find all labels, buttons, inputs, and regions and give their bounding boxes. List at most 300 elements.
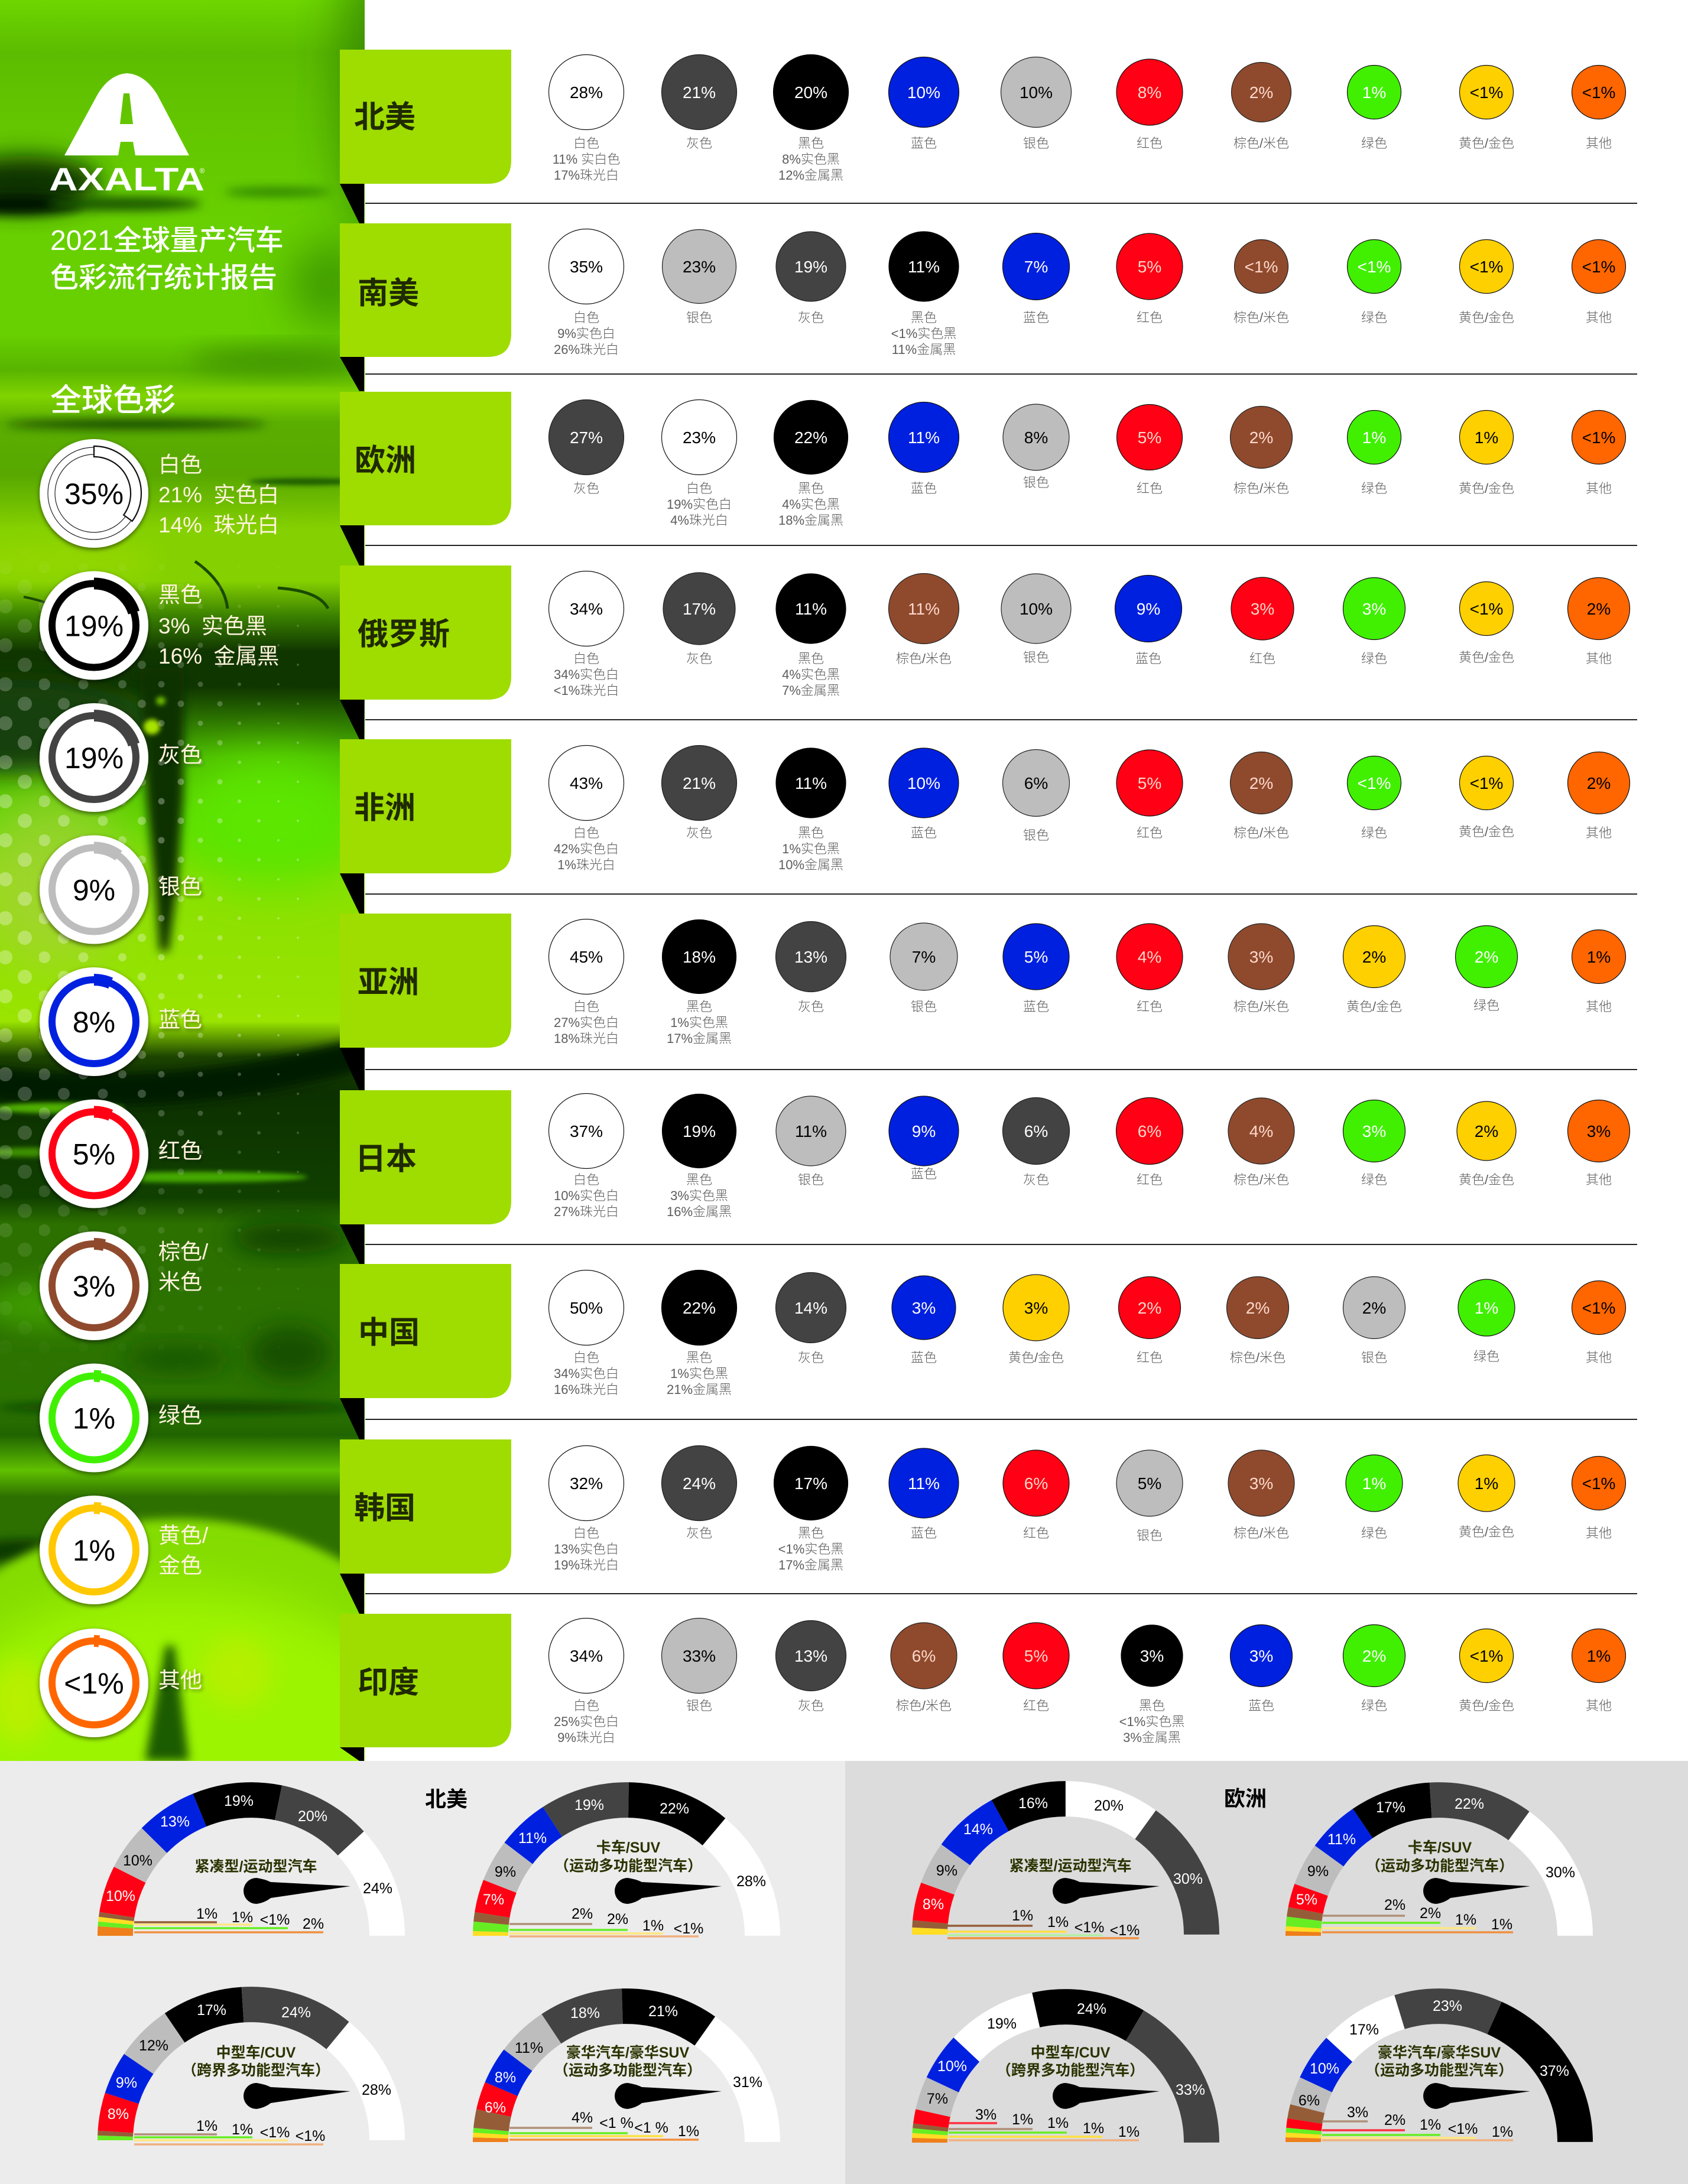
- 印度 white: 白色: [573, 1698, 599, 1713]
- gauge: NA compact/sport: 1%: [232, 1909, 253, 1926]
- 南美 brown: <1%: [1245, 258, 1278, 276]
- gauge: EU truck/SUV: （运动多功能型汽车）: [1366, 1858, 1514, 1874]
- gauge: NA truck/SUV: 19%: [574, 1797, 604, 1814]
- 亚洲 silver: 银色: [911, 999, 937, 1014]
- 南美 red: 5%: [1138, 258, 1161, 276]
- 俄罗斯 yellow: 黄色/金色: [1459, 650, 1514, 665]
- global other medallion: <1%: [64, 1667, 124, 1700]
- gauge: EU mid/CUV: [927, 2001, 1205, 2143]
- 中国 grey: 14%: [794, 1299, 827, 1317]
- 非洲 silver: [1002, 749, 1070, 843]
- 非洲 white: [548, 746, 624, 872]
- 南美 black: <1%实色黑: [891, 326, 956, 341]
- gauge: NA truck/SUV: 1%: [642, 1918, 664, 1934]
- gauge: NA compact/sport: 紧凑型/运动型汽车: [195, 1858, 317, 1875]
- 俄罗斯 blue: [1115, 576, 1182, 666]
- 非洲 other: 其他: [1586, 826, 1612, 840]
- 印度 yellow: [1459, 1629, 1514, 1713]
- 北美 black: [773, 54, 849, 183]
- 俄罗斯 grey: 灰色: [686, 651, 712, 666]
- gauge: NA luxury: <1 %: [634, 2120, 668, 2136]
- gauge: EU mid/CUV: 1%: [1012, 2111, 1033, 2128]
- gauge: EU truck/SUV: 22%: [1455, 1796, 1484, 1812]
- 欧洲 black: 黑色: [798, 481, 824, 496]
- gauge: EU compact/sport: 20%: [1094, 1798, 1124, 1814]
- 日本 black: 19%: [683, 1122, 716, 1140]
- 亚洲 black: 1%实色黑: [670, 1015, 728, 1030]
- 南美 white: [548, 229, 624, 357]
- 欧洲 red: 红色: [1137, 481, 1163, 496]
- logo: Axalta: [49, 73, 205, 197]
- gauge: NA mid/CUV: 中型车/CUV: [216, 2045, 296, 2061]
- global black label: 黑色: [158, 583, 202, 607]
- gauge: EU luxury: 23%: [1433, 1998, 1462, 2014]
- 非洲 black: 黑色: [798, 826, 824, 840]
- 俄罗斯 black: 4%实色黑: [782, 667, 840, 682]
- global black label: 16% 金属黑: [158, 644, 279, 668]
- 南美 brown: [1233, 240, 1289, 325]
- 非洲 brown: 2%: [1249, 774, 1273, 792]
- 中国 brown: 棕色/米色: [1230, 1350, 1286, 1365]
- gauge: NA mid/CUV: 28%: [362, 2082, 391, 2098]
- global white medallion: [40, 439, 148, 548]
- title: 2021全球量产汽车: [50, 225, 284, 256]
- 韩国 grey: 24%: [683, 1474, 716, 1493]
- 日本 yellow: 黄色/金色: [1459, 1172, 1514, 1187]
- 南美 brown: 棕色/米色: [1233, 310, 1289, 325]
- 欧洲 black: 18%金属黑: [778, 513, 843, 528]
- 北美 black: 20%: [794, 83, 827, 102]
- 韩国 yellow: [1458, 1455, 1515, 1539]
- 南美 grey: [776, 232, 846, 325]
- 北美 blue: 蓝色: [911, 136, 937, 151]
- gauge: NA mid/CUV: [108, 2002, 391, 2144]
- 印度 blue: 蓝色: [1248, 1698, 1274, 1713]
- gauge: NA luxury: 1%: [678, 2123, 699, 2140]
- 中国 blue: [892, 1276, 956, 1365]
- 中国 silver: 2%: [1362, 1299, 1386, 1317]
- 欧洲 grey: 灰色: [573, 481, 599, 496]
- 俄罗斯 silver: 10%: [1020, 600, 1053, 618]
- 俄罗斯 other: 2%: [1587, 600, 1611, 618]
- 中国 silver: 银色: [1361, 1350, 1387, 1365]
- 欧洲 brown: 2%: [1249, 428, 1273, 447]
- 非洲 black: 11%: [795, 774, 827, 792]
- 中国 black: 黑色: [686, 1350, 712, 1365]
- 韩国 white: 13%实色白: [554, 1542, 619, 1556]
- 欧洲 green: 绿色: [1361, 481, 1387, 496]
- 北美 black: 12%金属黑: [778, 168, 843, 183]
- 非洲 blue: 蓝色: [911, 826, 937, 840]
- 非洲 blue: 10%: [907, 774, 940, 792]
- 欧洲 green: 1%: [1362, 428, 1386, 447]
- 亚洲 green: 2%: [1475, 948, 1498, 966]
- 北美 yellow: 黄色/金色: [1459, 136, 1514, 151]
- 印度 green: 2%: [1362, 1647, 1386, 1665]
- title: [50, 225, 284, 294]
- 北美 silver: 银色: [1023, 136, 1049, 151]
- 韩国 black: 黑色: [798, 1526, 824, 1540]
- 中国 white: 16%珠光白: [554, 1382, 619, 1397]
- title: 色彩流行统计报告: [50, 262, 277, 294]
- 南美 blue: 7%: [1024, 258, 1048, 276]
- 北美 white: 11% 实白色: [553, 152, 620, 167]
- 俄罗斯 white: 34%实色白: [554, 667, 619, 682]
- 中国 blue: 3%: [912, 1299, 936, 1317]
- 中国 other: [1572, 1281, 1625, 1365]
- 韩国 blue: [889, 1448, 959, 1540]
- 印度 black: [1119, 1625, 1184, 1745]
- gauge: NA truck/SUV: （运动多功能型汽车）: [554, 1858, 702, 1874]
- global green label: 绿色: [158, 1403, 202, 1428]
- gauge: NA truck/SUV: 22%: [660, 1800, 689, 1817]
- 非洲 blue: [889, 748, 959, 840]
- 中国 grey: 灰色: [798, 1350, 824, 1365]
- gauge: NA luxury: [485, 2003, 762, 2142]
- 日本 silver: [776, 1096, 846, 1187]
- 欧洲 blue: 11%: [908, 428, 940, 447]
- tab: 欧洲: 欧洲: [355, 444, 416, 478]
- 南美 green: <1%: [1358, 258, 1391, 276]
- 欧洲 yellow: 1%: [1475, 428, 1498, 447]
- 欧洲 grey: [548, 399, 624, 496]
- panel: Europe row: [340, 392, 1625, 528]
- 南美 black: 11%: [908, 258, 940, 276]
- 中国 brown: [1227, 1276, 1288, 1365]
- 亚洲 other: 1%: [1587, 948, 1611, 966]
- 中国 red: 2%: [1138, 1299, 1161, 1317]
- 韩国 brown: [1228, 1450, 1294, 1540]
- 亚洲 other: 其他: [1586, 999, 1612, 1014]
- 日本 yellow: [1457, 1101, 1516, 1187]
- global red label: 红色: [158, 1139, 202, 1163]
- 日本 blue: 9%: [912, 1122, 936, 1140]
- gauge: NA mid/CUV: 12%: [139, 2037, 168, 2054]
- 欧洲 white: 19%实色白: [667, 497, 732, 512]
- gauge: EU compact/sport: 1%: [1012, 1907, 1033, 1924]
- tab: 韩国: [340, 1439, 511, 1574]
- gauge: NA compact/sport: 1%: [196, 1906, 218, 1922]
- tab: 北美: [340, 50, 511, 184]
- 日本 blue: 蓝色: [911, 1166, 937, 1181]
- 北美 brown: 2%: [1249, 83, 1273, 102]
- gauge: NA luxury: 11%: [515, 2040, 543, 2056]
- 非洲 grey: 灰色: [686, 826, 712, 840]
- 中国 white: 34%实色白: [554, 1366, 619, 1381]
- 印度 yellow: 黄色/金色: [1459, 1698, 1514, 1713]
- 非洲 black: 10%金属黑: [778, 857, 843, 872]
- 北美 black: 8%实色黑: [782, 152, 840, 167]
- gauge: EU mid/CUV: 10%: [937, 2058, 967, 2075]
- global black label: 3% 实色黑: [158, 614, 267, 638]
- 北美 white: [548, 54, 624, 183]
- tab: 非洲: [340, 739, 511, 873]
- 北美 grey: 灰色: [686, 136, 712, 151]
- 亚洲 brown: [1228, 924, 1294, 1014]
- gauge: NA truck/SUV: 卡车/SUV: [596, 1840, 660, 1856]
- gauge: EU truck/SUV: 卡车/SUV: [1408, 1840, 1472, 1856]
- 韩国 green: 1%: [1362, 1474, 1386, 1493]
- 南美 black: 11%金属黑: [892, 342, 956, 357]
- 俄罗斯 blue: 9%: [1137, 600, 1160, 618]
- 北美 green: 1%: [1362, 83, 1386, 102]
- 俄罗斯 other: 其他: [1586, 651, 1612, 666]
- 欧洲 white: 4%珠光白: [670, 513, 728, 528]
- gauge: EU mid/CUV: 24%: [1077, 2001, 1106, 2017]
- global yellow medallion: [40, 1496, 148, 1604]
- gauge: EU luxury: 2%: [1384, 2112, 1405, 2128]
- gauge: NA truck/SUV: 9%: [495, 1864, 516, 1880]
- gauge: NA truck/SUV: 11%: [518, 1830, 547, 1847]
- 俄罗斯 red: [1231, 577, 1294, 666]
- panel: China row: [340, 1264, 1625, 1398]
- 韩国 white: 19%珠光白: [554, 1558, 619, 1572]
- 欧洲 silver: [1003, 404, 1069, 490]
- 韩国 red: 6%: [1024, 1474, 1048, 1493]
- global yellow label: [158, 1523, 209, 1578]
- 日本 brown: 棕色/米色: [1233, 1172, 1289, 1187]
- 非洲 black: [776, 748, 846, 872]
- 亚洲 brown: 3%: [1249, 948, 1273, 966]
- global brown medallion: 3%: [73, 1270, 115, 1303]
- 印度 silver: 33%: [683, 1647, 716, 1665]
- global green medallion: 1%: [73, 1402, 115, 1435]
- 韩国 silver: 5%: [1138, 1474, 1161, 1493]
- 非洲 grey: [662, 746, 736, 840]
- gauge: NA truck/SUV: 28%: [736, 1873, 766, 1890]
- panel: South America row: [340, 223, 1625, 357]
- 北美 white: 白色: [573, 136, 599, 151]
- gauge: EU mid/CUV: 1%: [1118, 2124, 1140, 2140]
- gauge: EU compact/sport: 8%: [923, 1896, 944, 1913]
- 亚洲 green: [1455, 925, 1518, 1013]
- 印度 other: 1%: [1587, 1647, 1611, 1665]
- 北美 red: [1116, 59, 1183, 151]
- 南美 white: 35%: [570, 258, 603, 276]
- 日本 blue: [889, 1096, 959, 1181]
- 印度 other: [1572, 1629, 1625, 1713]
- 亚洲 red: 4%: [1138, 948, 1161, 966]
- 俄罗斯 yellow: <1%: [1470, 600, 1503, 618]
- 印度 black: 3%: [1140, 1647, 1164, 1665]
- global white label: [158, 453, 279, 537]
- gauge: NA compact/sport: 24%: [363, 1880, 392, 1897]
- 北美 green: 绿色: [1361, 136, 1387, 151]
- gauge: NA compact/sport: [106, 1793, 392, 1936]
- 中国 grey: [775, 1273, 846, 1365]
- tab: 北美: 北美: [354, 100, 415, 135]
- 非洲 yellow: 黄色/金色: [1459, 824, 1514, 839]
- 俄罗斯 green: [1343, 578, 1405, 666]
- 俄罗斯 black: 7%金属黑: [782, 683, 840, 698]
- 俄罗斯 silver: 银色: [1023, 650, 1049, 665]
- tab: 日本: [340, 1090, 511, 1224]
- 印度 blue: 3%: [1249, 1647, 1273, 1665]
- global black medallion: [40, 571, 148, 680]
- 中国 white: 50%: [570, 1299, 603, 1317]
- 欧洲 black: [774, 401, 848, 528]
- gauge: NA mid/CUV: 8%: [108, 2106, 129, 2123]
- 欧洲 grey: 27%: [570, 428, 603, 447]
- panel: Europe gauges background: [845, 1761, 1688, 2184]
- 印度 yellow: <1%: [1470, 1647, 1503, 1665]
- 日本 grey: [1002, 1098, 1070, 1187]
- gauge: EU compact/sport: 9%: [936, 1863, 957, 1879]
- 印度 red: 红色: [1023, 1698, 1049, 1713]
- 欧洲 silver: 8%: [1024, 428, 1048, 447]
- 韩国 red: [1003, 1450, 1069, 1540]
- 南美 other: [1572, 240, 1625, 325]
- gauge: NA compact/sport: 2%: [303, 1916, 324, 1932]
- gauge: NA luxury: 6%: [485, 2100, 506, 2116]
- 南美 grey: 19%: [794, 258, 827, 276]
- 欧洲 brown: 棕色/米色: [1233, 481, 1289, 496]
- 亚洲 silver: 7%: [912, 948, 936, 966]
- 印度 white: 34%: [570, 1647, 603, 1665]
- 南美 black: [889, 232, 959, 357]
- global blue label: 蓝色: [158, 1008, 202, 1032]
- 非洲 other: [1567, 752, 1630, 840]
- 北美 other: [1572, 65, 1625, 151]
- 俄罗斯 white: 白色: [573, 651, 599, 666]
- 印度 silver: 银色: [686, 1698, 712, 1713]
- 中国 yellow: 黄色/金色: [1008, 1350, 1064, 1365]
- 非洲 grey: 21%: [683, 774, 716, 792]
- 印度 black: <1%实色黑: [1119, 1714, 1184, 1729]
- gauge: NA mid/CUV: 24%: [281, 2004, 311, 2021]
- 北美 red: 8%: [1138, 83, 1161, 102]
- global other label: 其他: [158, 1668, 202, 1692]
- 北美 silver: [1001, 57, 1071, 151]
- 欧洲 red: 5%: [1138, 428, 1161, 447]
- gauge: NA mid/CUV: （跨界多功能型汽车）: [182, 2062, 330, 2079]
- 印度 brown: 棕色/米色: [896, 1698, 952, 1713]
- global silver label: 银色: [158, 875, 202, 899]
- panel: green sidebar background: [0, 0, 365, 1761]
- 南美 silver: 23%: [683, 258, 716, 276]
- 俄罗斯 green: 3%: [1362, 600, 1386, 618]
- 俄罗斯 other: [1567, 578, 1630, 666]
- 韩国 other: <1%: [1582, 1474, 1615, 1493]
- gauge: EU truck/SUV: 2%: [1420, 1905, 1441, 1922]
- global white label: 白色: [158, 453, 202, 477]
- 俄罗斯 silver: [1001, 574, 1071, 665]
- 南美 white: 9%实色白: [557, 326, 615, 341]
- 韩国 black: <1%实色黑: [778, 1542, 843, 1556]
- tab: 南美: 南美: [358, 277, 419, 311]
- 中国 black: 21%金属黑: [667, 1382, 732, 1397]
- gauge: EU compact/sport: 紧凑型/运动型汽车: [1009, 1858, 1131, 1874]
- 亚洲 other: [1572, 930, 1625, 1014]
- global silver medallion: 9%: [73, 873, 115, 906]
- 欧洲 black: 4%实色黑: [782, 497, 840, 512]
- 亚洲 silver: [890, 923, 957, 1014]
- 南美 white: 白色: [573, 310, 599, 325]
- gauge: EU luxury: [1299, 1998, 1575, 2142]
- 北美 red: 红色: [1137, 136, 1163, 151]
- row dividers: [365, 203, 1637, 1594]
- 南美 blue: 蓝色: [1023, 310, 1049, 325]
- 中国 other: 其他: [1586, 1350, 1612, 1365]
- panel: North America row: [340, 50, 1625, 184]
- 非洲 yellow: <1%: [1470, 774, 1503, 792]
- 俄罗斯 red: 红色: [1249, 651, 1275, 666]
- gauge: EU compact/sport: 1%: [1047, 1914, 1069, 1930]
- gauge: EU luxury: 10%: [1310, 2060, 1339, 2077]
- 俄罗斯 green: 绿色: [1361, 651, 1387, 666]
- 亚洲 blue: [1003, 924, 1069, 1014]
- 中国 black: 1%实色黑: [670, 1366, 728, 1381]
- gauge: EU luxury: （运动多功能型汽车）: [1365, 2062, 1513, 2079]
- 印度 silver: [662, 1618, 736, 1713]
- heading: 北美: 北美: [425, 1787, 468, 1811]
- 中国 green: 绿色: [1473, 1349, 1499, 1364]
- 中国 white: [548, 1270, 624, 1397]
- gauge: EU mid/CUV: 1%: [1083, 2120, 1104, 2137]
- 亚洲 white: 18%珠光白: [554, 1031, 619, 1046]
- panel: Korea row: [340, 1439, 1625, 1574]
- 欧洲 brown: [1231, 407, 1292, 496]
- 日本 white: 白色: [573, 1172, 599, 1187]
- 韩国 white: [548, 1445, 624, 1572]
- 韩国 white: 白色: [573, 1526, 599, 1540]
- 印度 grey: 13%: [794, 1647, 827, 1665]
- 亚洲 red: 红色: [1137, 999, 1163, 1014]
- gauge: NA luxury: 4%: [572, 2110, 593, 2126]
- gauge: NA mid/CUV: 17%: [197, 2002, 226, 2019]
- gauge: EU truck/SUV: 1%: [1455, 1912, 1476, 1928]
- 中国 green: [1458, 1279, 1515, 1364]
- 印度 black: 3%金属黑: [1123, 1730, 1181, 1745]
- global white label: 21% 实色白: [158, 483, 279, 507]
- 韩国 other: [1572, 1456, 1625, 1540]
- 日本 black: 黑色: [686, 1172, 712, 1187]
- gauge: NA truck/SUV: [483, 1797, 766, 1937]
- 中国 silver: [1343, 1276, 1405, 1365]
- 日本 brown: [1228, 1098, 1294, 1187]
- 韩国 red: 红色: [1023, 1526, 1049, 1540]
- 日本 grey: 6%: [1024, 1122, 1048, 1140]
- gauge: EU luxury: <1%: [1448, 2121, 1478, 2137]
- 南美 black: 黑色: [911, 310, 937, 325]
- 非洲 brown: [1231, 752, 1292, 840]
- 中国 brown: 2%: [1246, 1299, 1270, 1317]
- 亚洲 white: 27%实色白: [554, 1015, 619, 1030]
- 南美 grey: 灰色: [798, 310, 824, 325]
- 韩国 blue: 11%: [908, 1474, 940, 1493]
- global grey label: 灰色: [158, 743, 202, 767]
- 俄罗斯 brown: 11%: [908, 600, 940, 618]
- 非洲 black: 1%实色黑: [782, 841, 840, 856]
- global brown medallion: [40, 1231, 148, 1340]
- 非洲 white: 43%: [570, 774, 603, 792]
- tab: 中国: 中国: [358, 1316, 420, 1350]
- gauge: NA mid/CUV: 1%: [196, 2118, 218, 2134]
- 俄罗斯 black: [776, 574, 846, 698]
- 印度 white: [548, 1618, 624, 1745]
- 亚洲 white: 45%: [570, 948, 603, 966]
- gauge: NA luxury: 21%: [648, 2003, 678, 2020]
- 印度 grey: 灰色: [798, 1698, 824, 1713]
- 非洲 silver: 银色: [1023, 828, 1049, 843]
- 俄罗斯 brown: 棕色/米色: [896, 651, 952, 666]
- global brown label: [158, 1240, 209, 1294]
- 北美 grey: [662, 54, 736, 151]
- 欧洲 other: 其他: [1586, 481, 1612, 496]
- 印度 green: [1343, 1625, 1405, 1713]
- 印度 other: 其他: [1586, 1698, 1612, 1713]
- 亚洲 black: 18%: [683, 948, 716, 966]
